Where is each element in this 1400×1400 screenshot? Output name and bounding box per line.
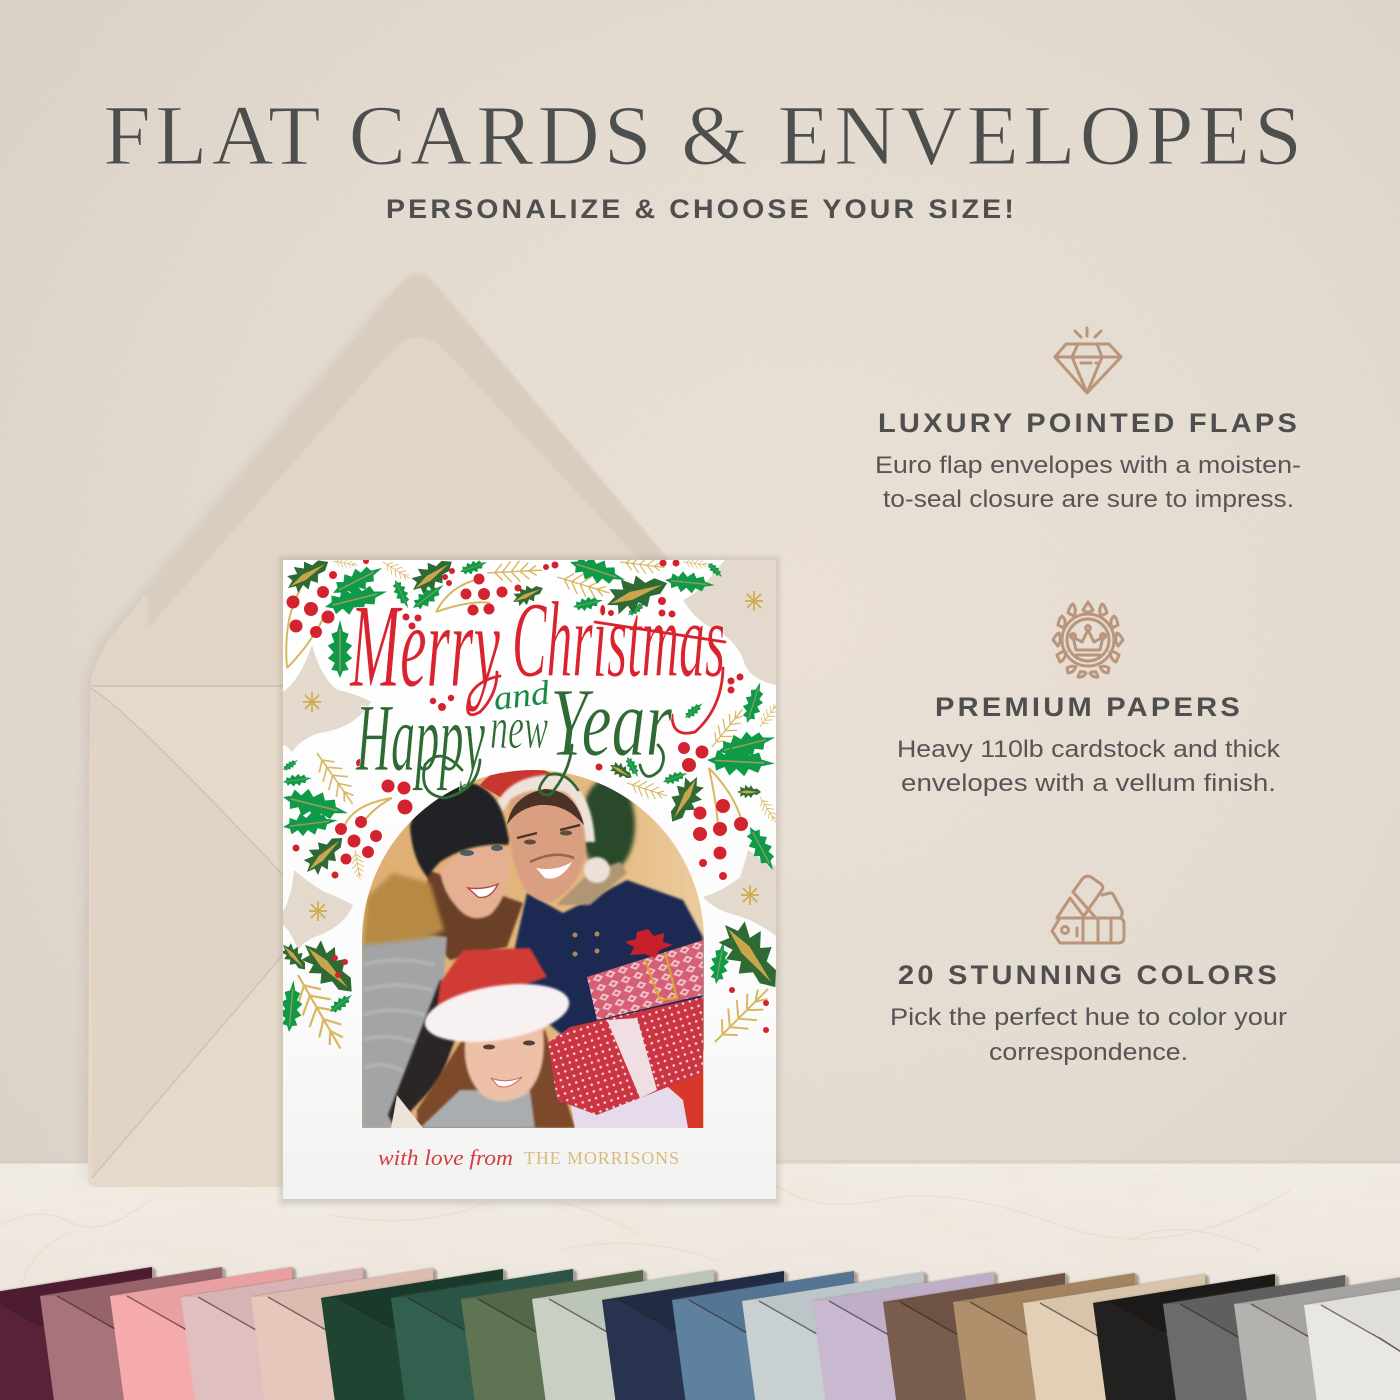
swatch: caramel	[953, 1273, 1153, 1400]
description	[890, 1004, 1287, 1066]
heading: 20 STUNNING COLORS	[898, 960, 1280, 990]
swatch: blush	[181, 1268, 381, 1400]
icon: colour swatch fan	[1052, 876, 1124, 943]
greeting card	[277, 550, 794, 1205]
title: FLAT CARDS & ENVELOPES	[103, 87, 1302, 183]
swatch: navy	[602, 1271, 802, 1400]
photo background	[362, 770, 704, 1128]
greeting lettering	[349, 579, 725, 798]
swatch: sand	[1023, 1274, 1223, 1400]
man's collar and pom pom	[556, 857, 627, 956]
man's hat	[480, 766, 595, 842]
swatch: peach	[251, 1268, 451, 1400]
heading: PREMIUM PAPERS	[935, 692, 1243, 722]
woman's coat	[362, 935, 447, 1128]
left side panel	[90, 688, 283, 1178]
card sign-off: with love from	[378, 1145, 513, 1170]
gold stars	[745, 591, 763, 611]
woman's hair	[425, 870, 523, 960]
child's sweater	[420, 1090, 535, 1128]
swatch: forest green	[321, 1269, 521, 1400]
subtitle: PERSONALIZE & CHOOSE YOUR SIZE!	[386, 194, 1017, 224]
swatch: sage	[532, 1270, 732, 1400]
description	[897, 736, 1281, 797]
child's collar	[391, 1095, 423, 1128]
swatch: olive	[461, 1270, 661, 1400]
fur collar	[363, 873, 444, 945]
gold stems	[286, 579, 742, 830]
description: Pick the perfect hue to color your	[890, 1004, 1287, 1031]
swatch: lilac	[812, 1272, 1012, 1400]
icon: crown badge	[1053, 602, 1123, 677]
icon: diamond	[1055, 328, 1121, 393]
envelope body	[88, 686, 300, 1187]
child's red hat	[437, 948, 547, 1010]
envelope shadow	[84, 285, 400, 1190]
feature: luxury pointed flaps	[875, 328, 1301, 513]
swatch: black	[1093, 1274, 1293, 1400]
holly leaves	[278, 550, 782, 1033]
gift stack	[548, 929, 703, 1128]
swatch: burgundy	[0, 1267, 170, 1400]
card sign-off	[378, 1145, 679, 1170]
swatch: slate blue	[672, 1271, 872, 1400]
colour swatch envelopes	[0, 1267, 1400, 1400]
middle gift	[548, 997, 703, 1115]
flap liner band	[147, 275, 668, 628]
green flourishes	[424, 745, 664, 798]
description: envelopes with a vellum finish.	[901, 770, 1276, 797]
gift bow	[625, 929, 673, 958]
woman's dark sleeve	[386, 979, 456, 1125]
feature: premium papers	[897, 602, 1281, 797]
description	[875, 452, 1301, 513]
description: Heavy 110lb cardstock and thick	[897, 736, 1281, 763]
top gift	[587, 940, 703, 1020]
swatch: pink	[110, 1267, 310, 1400]
happy new year: Year	[550, 669, 673, 777]
envelope flap	[90, 271, 672, 700]
bottom gift	[570, 1087, 688, 1128]
black beanie	[410, 782, 509, 878]
gold ferns	[284, 554, 783, 1057]
swatch: pale blue	[742, 1272, 942, 1400]
description: to-seal closure are sure to impress.	[883, 486, 1294, 513]
merry christmas: Merry	[349, 579, 500, 712]
man's jacket	[515, 880, 703, 1060]
swatch: ivory	[1304, 1276, 1400, 1400]
heading: LUXURY POINTED FLAPS	[878, 408, 1300, 438]
happy new year: Happy	[355, 684, 485, 791]
and: and	[491, 674, 553, 718]
child's white brim	[423, 982, 571, 1044]
red berries	[286, 558, 769, 1033]
poinsettia shapes	[283, 560, 776, 950]
child's hair	[417, 1030, 575, 1128]
greeting card: Christmas	[512, 581, 725, 700]
swatch: grey	[1234, 1275, 1400, 1400]
marble counter	[0, 1160, 1400, 1400]
description: correspondence.	[989, 1039, 1188, 1066]
swatch: chocolate	[883, 1273, 1083, 1400]
pine leaves	[277, 550, 794, 1004]
card sign-off: THE MORRISONS	[524, 1148, 679, 1168]
envelope	[84, 271, 672, 1190]
child's face	[465, 1028, 544, 1102]
feature: 20 stunning colors	[890, 876, 1287, 1066]
woman's face	[440, 845, 509, 918]
swatch: teal green	[391, 1269, 591, 1400]
description: Euro flap envelopes with a moisten-	[875, 452, 1301, 479]
happy new year: new	[490, 695, 548, 761]
lettering flourishes	[468, 622, 725, 733]
swatch: charcoal	[1163, 1275, 1363, 1400]
photo arch	[362, 766, 704, 1128]
swatch: dusty rose	[40, 1267, 240, 1400]
man's face	[507, 789, 586, 902]
wreath	[581, 778, 635, 872]
